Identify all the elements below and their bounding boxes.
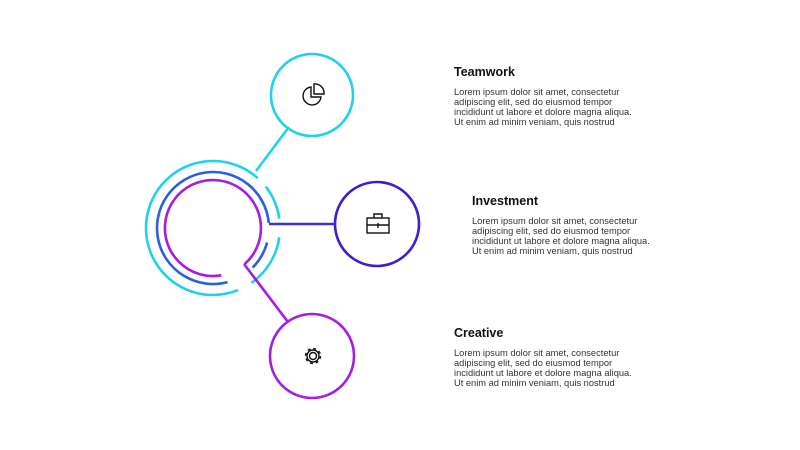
- text: creative: adipiscing elit, sed do eiusmod tempor: [454, 358, 612, 368]
- text: teamwork: Teamwork: [454, 65, 515, 79]
- text: investment: Lorem ipsum dolor sit amet, consectetur: [472, 216, 637, 226]
- text: creative: Lorem ipsum dolor sit amet, consectetur: [454, 348, 619, 358]
- icon: pie chart: [303, 84, 324, 105]
- text: creative: Ut enim ad minim veniam, quis nostrud: [454, 378, 615, 388]
- icon: briefcase: [367, 214, 389, 233]
- text: teamwork: Ut enim ad minim veniam, quis nostrud: [454, 117, 615, 127]
- text: creative: incididunt ut labore et dolore magna aliqua.: [454, 368, 632, 378]
- text: investment: incididunt ut labore et dolore magna aliqua.: [472, 236, 650, 246]
- text: investment: [472, 194, 650, 256]
- text: investment: adipiscing elit, sed do eiusmod tempor: [472, 226, 630, 236]
- central rings: [146, 161, 279, 295]
- icon: gear: [306, 348, 320, 364]
- text: teamwork: incididunt ut labore et dolore magna aliqua.: [454, 107, 632, 117]
- text: teamwork: adipiscing elit, sed do eiusmod tempor: [454, 97, 612, 107]
- connectors: [244, 127, 336, 322]
- text: teamwork: Lorem ipsum dolor sit amet, consectetur: [454, 87, 619, 97]
- circle: teamwork: [271, 54, 353, 136]
- circle: investment: [335, 182, 419, 266]
- text: investment: Ut enim ad minim veniam, quis nostrud: [472, 246, 633, 256]
- text: creative: Creative: [454, 326, 503, 340]
- text: investment: Investment: [472, 194, 538, 208]
- text: teamwork: [454, 65, 632, 127]
- circle: creative: [270, 314, 354, 398]
- text: creative: [454, 326, 632, 388]
